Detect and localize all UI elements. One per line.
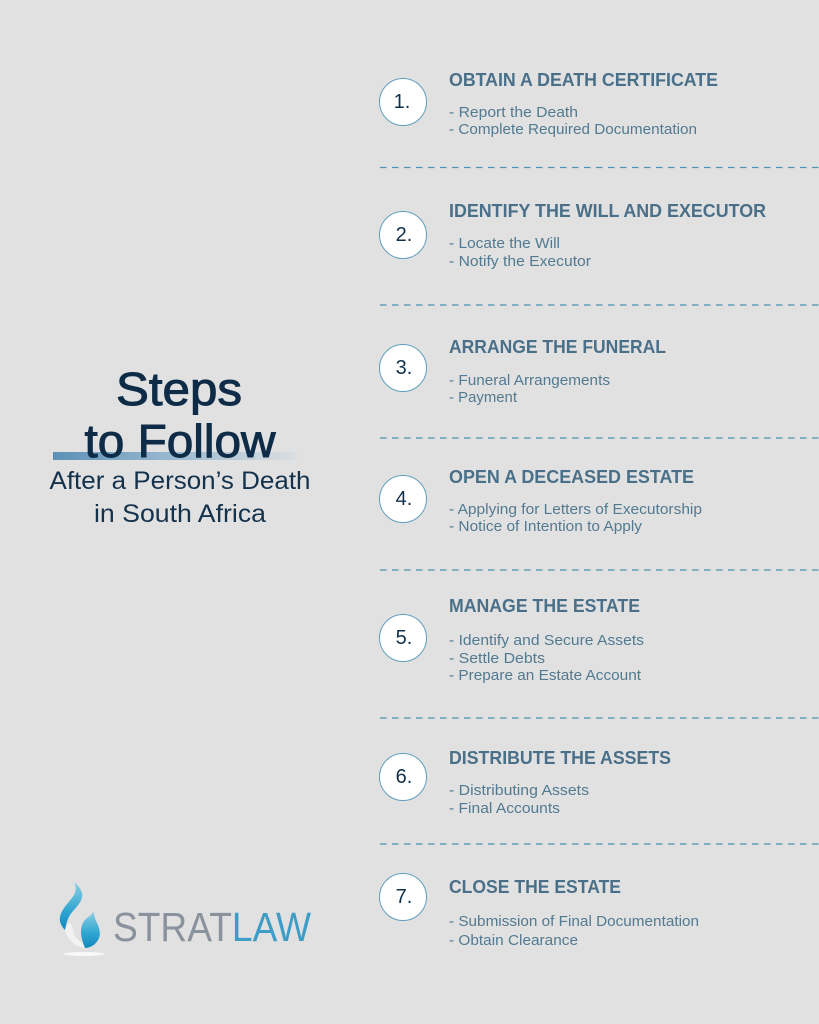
number badge 3 [380,344,426,392]
text 1: - Complete Required Documentation [449,122,697,138]
title underline swoosh [53,452,303,460]
text 7 [449,914,699,949]
text 1 [449,105,697,138]
text 5 [449,633,644,684]
number badge 1: 1. [394,91,410,113]
subtitle: After a Person’s Death [50,467,310,495]
step 7 [380,874,699,949]
text 3: - Payment [449,390,517,406]
subtitle [50,467,310,528]
title block [50,363,310,528]
step 5 [380,596,644,684]
logo: Stratlaw [60,882,311,956]
step 6 [380,748,671,817]
heading 1: OBTAIN A DEATH CERTIFICATE [449,70,718,90]
heading 6: DISTRIBUTE THE ASSETS [449,748,671,768]
text 5: - Prepare an Estate Account [449,668,641,684]
text 4: - Applying for Letters of Executorship [449,502,702,518]
text 7: - Obtain Clearance [449,933,578,949]
heading 4: OPEN A DECEASED ESTATE [449,467,694,487]
heading 2: IDENTIFY THE WILL AND EXECUTOR [449,201,766,221]
number badge 4 [380,476,426,522]
number badge 2 [380,212,426,258]
step 1 [380,70,718,138]
heading 3: ARRANGE THE FUNERAL [449,337,666,357]
text 2: - Locate the Will [449,236,560,252]
number badge 5: 5. [396,627,412,649]
text 6: - Distributing Assets [449,783,589,799]
number badge 4: 4. [396,488,412,510]
subtitle: in South Africa [94,500,266,528]
step 2 [380,201,766,270]
number badge 7 [380,874,426,920]
number badge 2: 2. [396,224,412,246]
number badge 6: 6. [396,766,412,788]
title: Steps to Follow: Steps [116,363,242,415]
number badge 6 [380,754,426,800]
text 3: - Funeral Arrangements [449,373,610,389]
wordmark: STRATLAW [113,904,311,950]
text 4 [449,502,702,535]
text 3 [449,373,610,406]
icon: flame [60,882,105,956]
number badge 1 [380,78,426,126]
step 4 [380,467,702,535]
text 1: - Report the Death [449,105,578,121]
text 7: - Submission of Final Documentation [449,914,699,930]
heading 5: MANAGE THE ESTATE [449,596,640,616]
text 5: - Settle Debts [449,651,545,667]
text 6: - Final Accounts [449,801,560,817]
number badge 5 [380,614,426,662]
text 2: - Notify the Executor [449,254,591,270]
text 6 [449,783,589,817]
heading 7: CLOSE THE ESTATE [449,877,621,897]
title: Steps to Follow: to Follow [84,415,276,467]
title: Steps to Follow [84,363,276,467]
text 2 [449,236,591,270]
text 4: - Notice of Intention to Apply [449,519,643,535]
step 3 [380,337,666,406]
text 5: - Identify and Secure Assets [449,633,644,649]
number badge 7: 7. [396,886,412,908]
number badge 3: 3. [396,357,412,379]
